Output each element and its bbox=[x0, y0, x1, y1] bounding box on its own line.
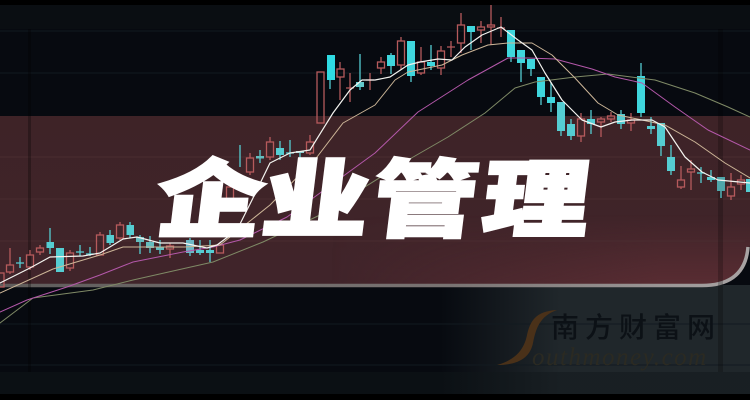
watermark url: outhmoney.com bbox=[532, 344, 708, 371]
title: 管 bbox=[367, 154, 484, 248]
title: 业 bbox=[258, 154, 375, 248]
watermark chinese name: 南方财富网 bbox=[551, 312, 721, 343]
panel: dark red banner bbox=[0, 116, 750, 286]
candlestick chart bbox=[0, 5, 750, 323]
title: 企 bbox=[152, 154, 269, 248]
title bbox=[152, 154, 595, 248]
title: 理 bbox=[478, 154, 595, 248]
watermark logo bbox=[497, 310, 721, 371]
cyan candles bbox=[16, 26, 750, 272]
moving average lines bbox=[0, 27, 750, 323]
red candles bbox=[0, 5, 744, 287]
icon: S swoosh bbox=[497, 310, 557, 365]
frame shadow lines bbox=[28, 29, 723, 372]
